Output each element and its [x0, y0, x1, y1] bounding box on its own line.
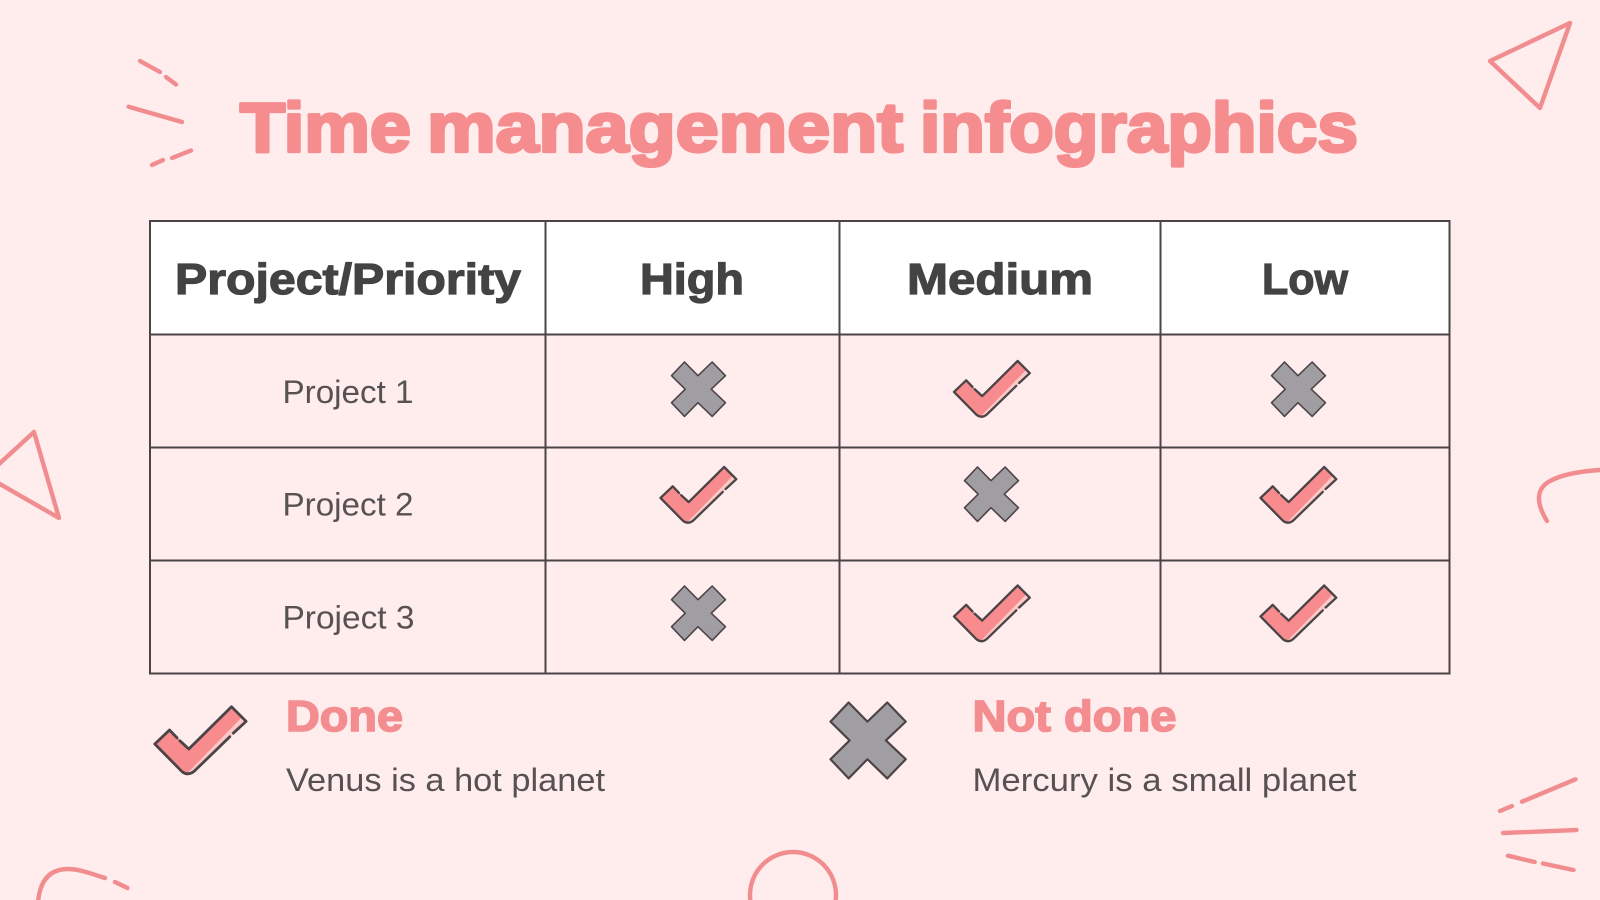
- table grid: [150, 221, 1450, 674]
- legend heading: Not done: Not done: [972, 692, 1176, 741]
- icon: large cross: [830, 702, 906, 778]
- icon: Project 3 Medium done: [954, 586, 1030, 641]
- decoration: top-left dashes: [129, 61, 191, 165]
- icon: Project 1 Medium done: [954, 361, 1030, 417]
- title: infographics: [920, 88, 1358, 166]
- table header background: [150, 221, 1449, 334]
- header: High: High: [640, 255, 744, 304]
- title: Time: [240, 88, 411, 166]
- row label: Project 2: Project 2: [282, 486, 414, 522]
- decoration: right arc: [1539, 470, 1600, 521]
- icon: Project 3 High not done: [672, 586, 725, 640]
- legend text: Mercury: Mercury is a small planet: [972, 762, 1356, 798]
- icon: Project 3 Low done: [1260, 586, 1336, 641]
- header: Project/Priority: Project/Priority: [175, 255, 522, 304]
- decoration: top-right triangle: [1490, 23, 1570, 108]
- decoration: bottom-right dashes: [1500, 779, 1576, 870]
- decoration: bottom-left arc: [38, 869, 128, 900]
- legend: done: [155, 692, 605, 798]
- table: [150, 221, 1450, 674]
- row label: Project 1: Project 1: [282, 374, 414, 410]
- decoration: bottom circle: [750, 852, 836, 900]
- icon: Project 2 Medium not done: [964, 467, 1018, 521]
- title: [240, 88, 1358, 166]
- legend: not done: [830, 692, 1356, 798]
- header: Medium: Medium: [907, 255, 1093, 304]
- legend heading: Done: Done: [286, 692, 403, 741]
- header: Low: Low: [1262, 255, 1349, 304]
- icon: Project 1 Low not done: [1272, 362, 1325, 416]
- row label: Project 3: Project 3: [282, 600, 414, 636]
- title: management: [427, 88, 903, 166]
- icon: Project 2 High done: [660, 467, 736, 523]
- icon: large check mark: [155, 707, 246, 774]
- decoration: left triangle: [0, 432, 59, 518]
- legend text: Venus: Venus is a hot planet: [286, 762, 605, 798]
- icon: Project 1 High not done: [672, 362, 725, 416]
- icon: Project 2 Low done: [1260, 467, 1336, 523]
